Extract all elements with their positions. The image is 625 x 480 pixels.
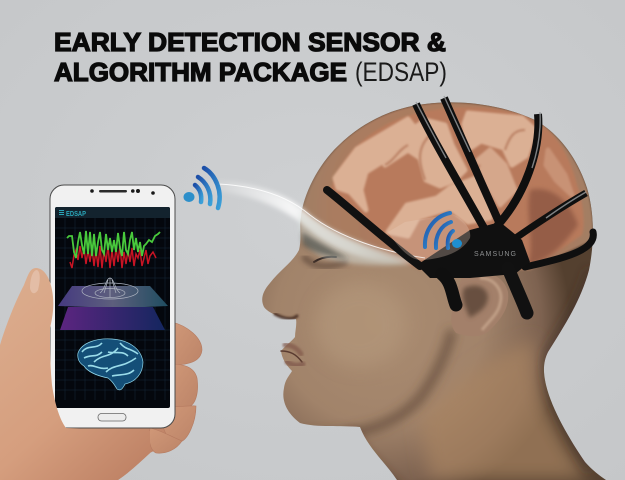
nose and lips detail xyxy=(275,257,345,365)
ear hook xyxy=(442,274,456,305)
middle finger xyxy=(168,364,198,408)
app name: EDSAP xyxy=(66,209,86,218)
fingers xyxy=(149,322,202,453)
peak inner xyxy=(95,288,125,298)
sensor pair xyxy=(131,189,140,193)
upper right fold xyxy=(464,113,535,165)
arc mid xyxy=(198,177,210,204)
jaw shadow xyxy=(305,330,452,436)
front strap xyxy=(327,190,420,266)
title xyxy=(54,27,447,87)
top strap 3 xyxy=(497,114,538,226)
rear mid fold xyxy=(478,150,515,205)
camera dots xyxy=(90,189,155,195)
hand behind phone xyxy=(0,322,175,480)
upper middle fold xyxy=(385,120,465,186)
neck front shadow xyxy=(372,448,401,480)
brain highlights xyxy=(82,343,138,376)
top strap 1 xyxy=(416,104,484,228)
thin streak xyxy=(218,184,425,258)
glass band over brow xyxy=(299,212,420,265)
arc small xyxy=(195,185,201,202)
header bar xyxy=(55,207,170,218)
brain shape xyxy=(78,339,143,390)
rear arm xyxy=(508,268,527,313)
thumb and palm overlay xyxy=(0,268,150,480)
lower loop fold xyxy=(388,178,490,236)
brain folds xyxy=(335,113,572,236)
title line 2: ALGORITHM PACKAGE xyxy=(54,57,347,87)
red wave xyxy=(70,246,156,268)
grid xyxy=(55,218,170,400)
eye xyxy=(314,257,336,262)
far rear fold xyxy=(546,150,572,195)
screen contents xyxy=(55,207,170,400)
signal dot xyxy=(184,192,194,202)
phone body xyxy=(50,185,175,428)
upper lip shade xyxy=(285,345,301,354)
skull tone xyxy=(300,102,593,270)
wave from phone to head xyxy=(205,180,418,263)
mesh surface xyxy=(58,286,168,308)
arc small xyxy=(448,231,453,248)
top strap 2 xyxy=(444,98,499,222)
wearable sensor cap xyxy=(327,96,593,313)
brand: SAMSUNG xyxy=(474,251,516,258)
index finger xyxy=(172,322,202,365)
clear window xyxy=(388,214,470,260)
home button xyxy=(98,414,126,421)
title acronym: (EDSAP) xyxy=(355,57,447,87)
lower lip shade xyxy=(287,362,303,365)
brain xyxy=(330,107,584,268)
arc large xyxy=(425,213,450,247)
ear shape xyxy=(451,272,508,336)
front sensor xyxy=(90,189,94,193)
head illustration xyxy=(262,102,606,480)
shading and neck xyxy=(300,102,593,480)
green wave xyxy=(67,231,160,258)
ear xyxy=(451,272,508,336)
icon: wifi from phone xyxy=(184,168,220,208)
darker lower rear lobe xyxy=(528,189,578,265)
lips xyxy=(281,351,302,362)
ear rim xyxy=(480,278,501,330)
mesh peak xyxy=(82,278,138,299)
neck tone xyxy=(420,340,590,480)
title line 1: EARLY DETECTION SENSOR & xyxy=(54,27,446,57)
speaker xyxy=(99,190,127,192)
icon: wifi on head xyxy=(425,213,462,248)
eye socket xyxy=(305,258,345,266)
nostril xyxy=(275,314,297,318)
brain base xyxy=(330,107,584,268)
front camera xyxy=(151,191,155,195)
strap highlights xyxy=(416,96,586,218)
rear strap glass xyxy=(510,193,586,242)
signal dot xyxy=(452,239,462,248)
light beam xyxy=(205,180,425,265)
peak rings xyxy=(82,283,138,299)
ear inner shadow xyxy=(463,286,488,318)
little finger xyxy=(149,428,182,453)
arc mid xyxy=(436,222,451,248)
hub xyxy=(417,222,530,278)
front lobe fold xyxy=(335,119,415,210)
peak cone xyxy=(100,278,120,297)
menu icon xyxy=(59,210,64,214)
rear lower strap xyxy=(525,232,593,267)
arc large xyxy=(204,168,220,208)
head silhouette xyxy=(262,102,606,480)
thumb nail xyxy=(30,270,40,293)
dark brow shadow xyxy=(302,232,348,258)
phone xyxy=(50,185,175,428)
purple plane xyxy=(60,307,165,330)
screen xyxy=(55,207,170,408)
phone brain xyxy=(78,339,143,390)
sulci xyxy=(385,130,525,180)
ring finger xyxy=(163,406,196,442)
cheek highlight xyxy=(324,294,378,356)
rear shadow xyxy=(547,270,590,470)
